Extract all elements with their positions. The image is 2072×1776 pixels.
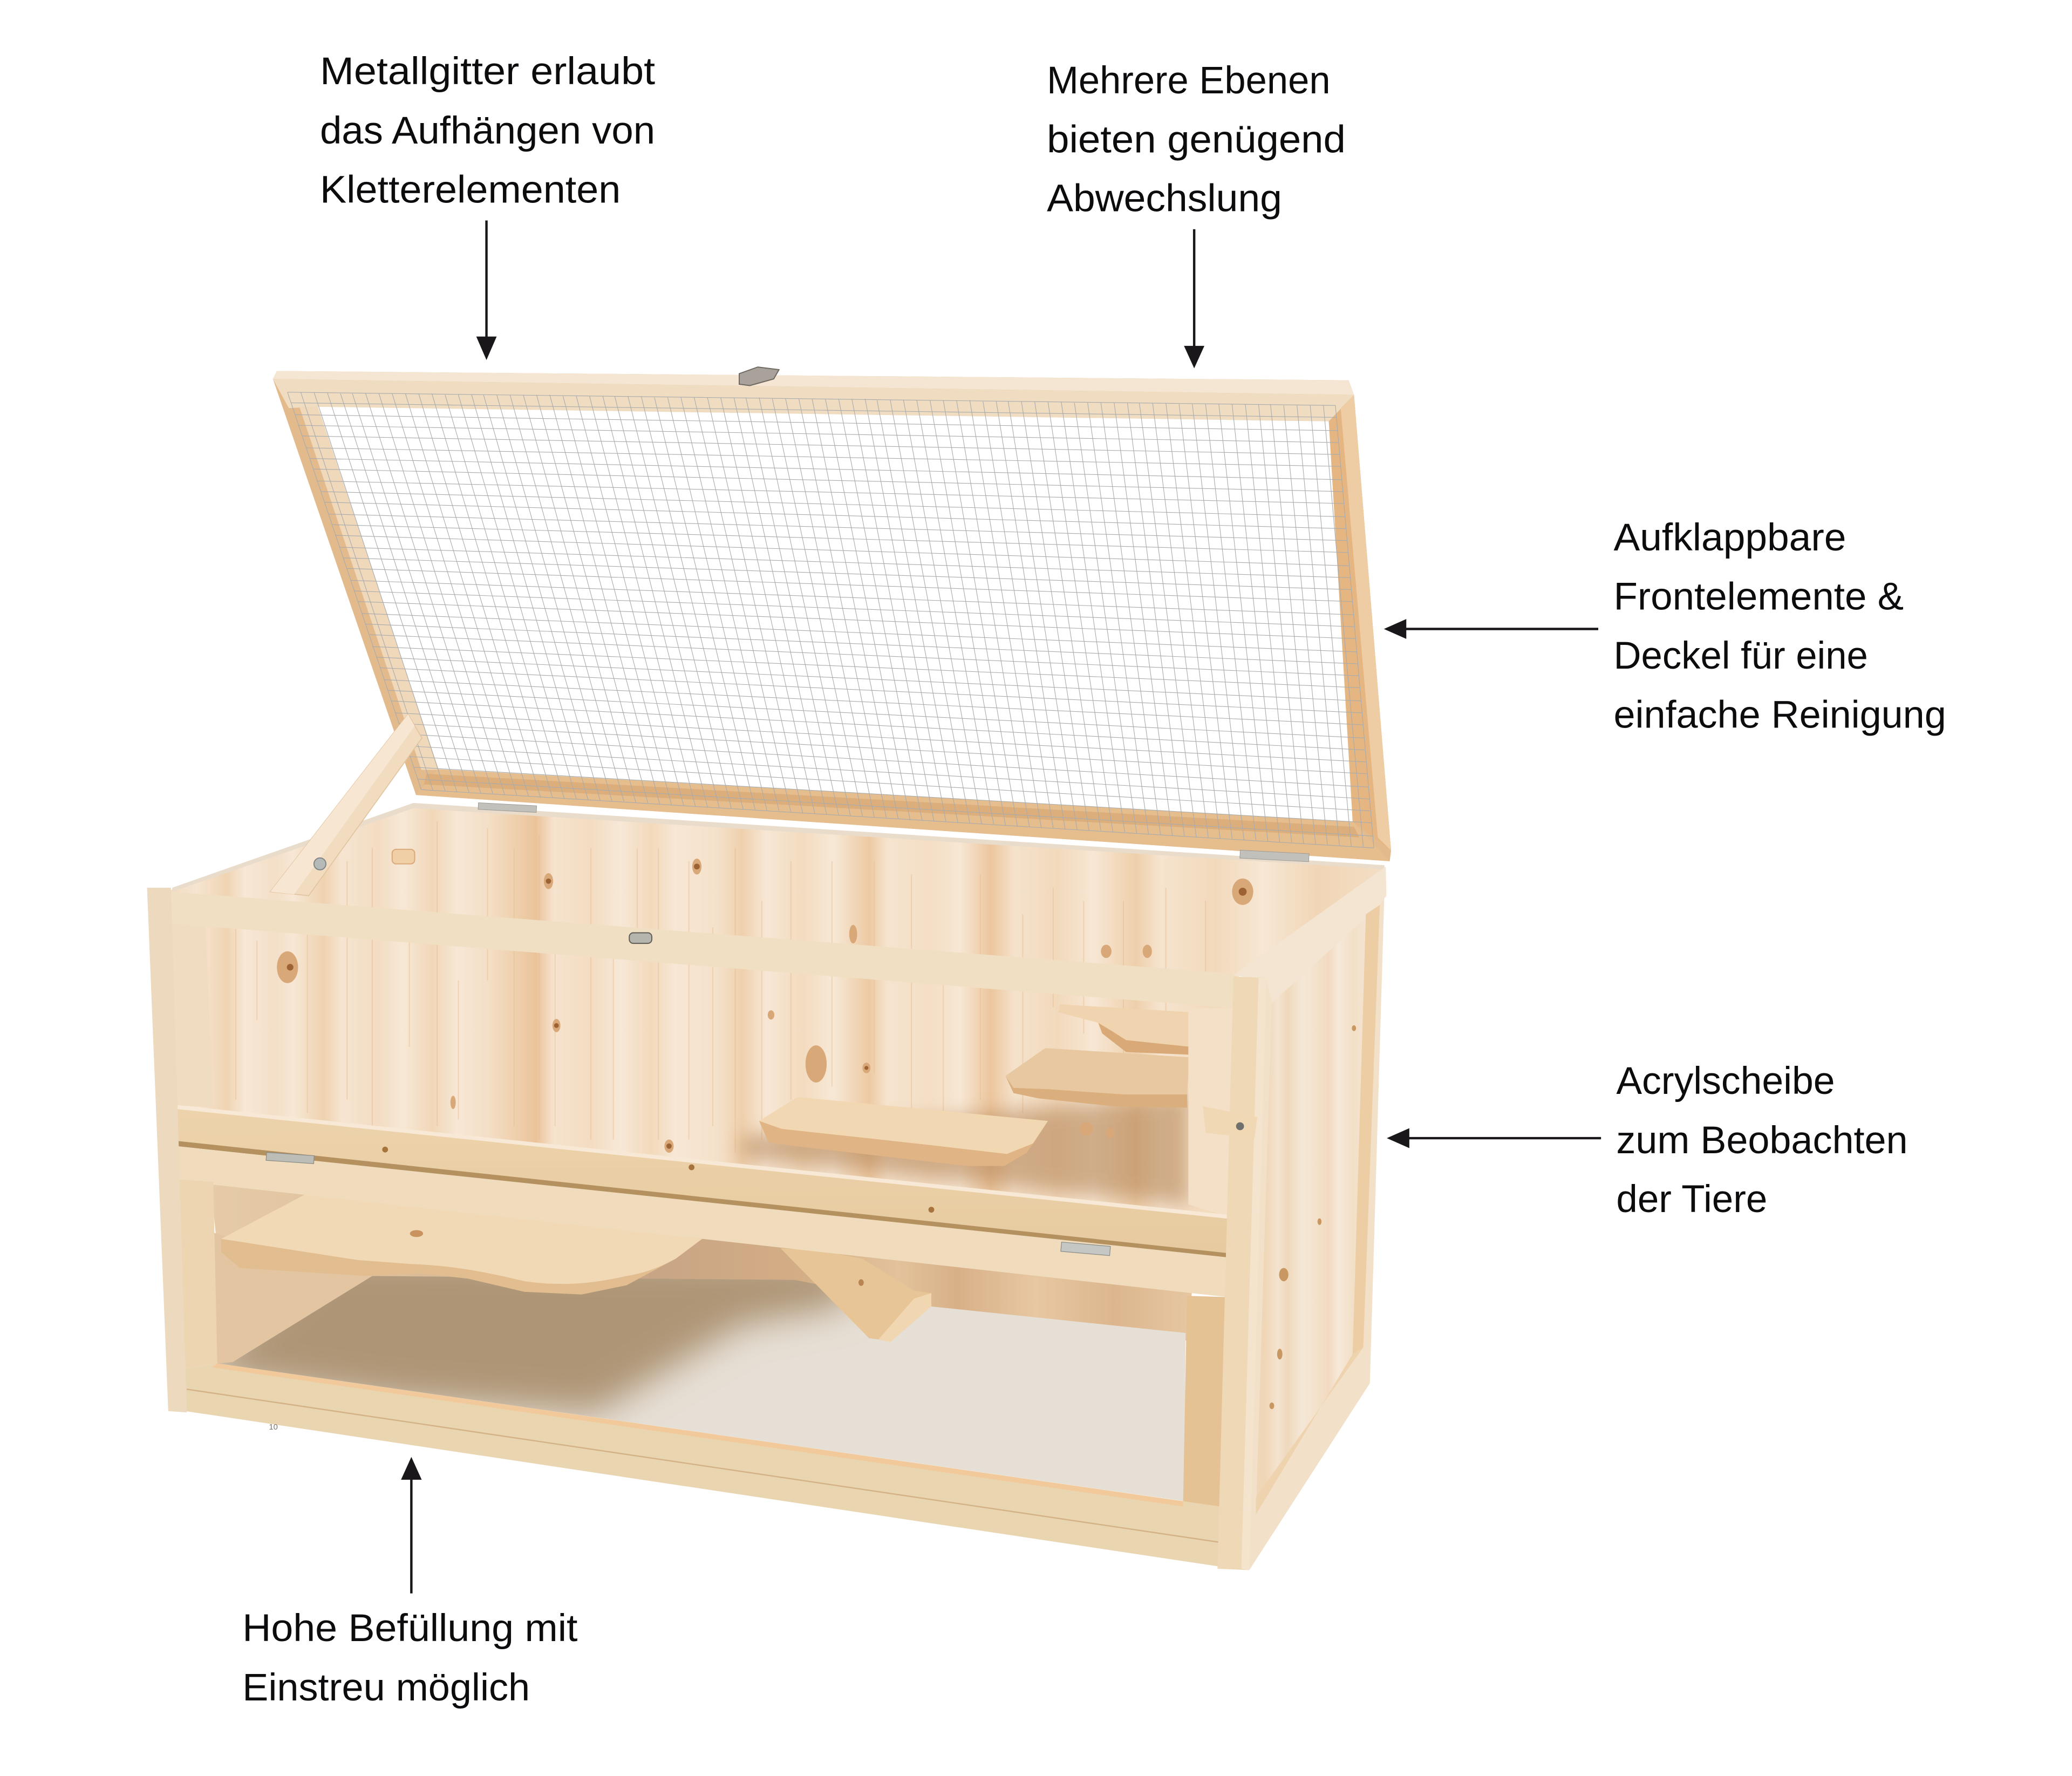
wooden peg: [392, 849, 414, 864]
callout: acrylic pane: der Tiere: [1616, 1178, 1767, 1221]
icon: platform knot: [410, 1230, 423, 1237]
hamster cage photo: [147, 367, 1391, 1570]
callout: acrylic pane: [1616, 1060, 1908, 1221]
arrow: acrylic pane: [1387, 1128, 1601, 1148]
floor: [219, 1276, 1186, 1501]
callout: folding front and lid: einfache Reinigung: [1613, 694, 1946, 737]
interior back wall: [169, 803, 1385, 1272]
icon: left lid hinge: [478, 803, 537, 812]
upper door bottom rail: [176, 1108, 1231, 1254]
callout: metal mesh: Metallgitter erlaubt: [320, 50, 655, 93]
left corner post: [147, 888, 187, 1412]
middle rail: [176, 1146, 1228, 1297]
arrow: bedding: [401, 1457, 422, 1594]
callout: acrylic pane: zum Beobachten: [1616, 1119, 1908, 1162]
callout: bedding: Hohe Befüllung mit: [242, 1607, 578, 1650]
icon: right lid hinge: [1240, 850, 1309, 862]
lower platform: [221, 1193, 702, 1295]
callout: folding front and lid: [1613, 516, 1946, 737]
lower right post: [1183, 1296, 1229, 1510]
callout: folding front and lid: Frontelemente &: [1613, 575, 1904, 618]
door latch block: [1203, 1106, 1257, 1138]
open lid with metal mesh: [273, 367, 1391, 861]
middle shelf: [1006, 1048, 1190, 1108]
arrow: folding front and lid: [1384, 619, 1598, 639]
callout: metal mesh: das Aufhängen von: [320, 110, 655, 152]
icon: left door hinge: [266, 1152, 314, 1163]
bottom rail: [186, 1363, 1229, 1568]
callout: levels: Abwechslung: [1047, 178, 1282, 220]
callout: folding front and lid: Aufklappbare: [1613, 516, 1846, 559]
callout: metal mesh: Kletterelementen: [320, 169, 621, 212]
lower shelf: [759, 1097, 1048, 1166]
upper door right stile: [1188, 1008, 1235, 1217]
upper door left stile: [169, 923, 213, 1108]
lower compartment: [199, 1173, 1192, 1501]
arrow: metal mesh: [476, 221, 496, 360]
callout: levels: bieten genügend: [1047, 118, 1346, 161]
climbing shelves: [759, 1004, 1192, 1166]
support strut: [270, 714, 422, 896]
icon: door clasp: [629, 933, 652, 943]
upper door top rail: [169, 892, 1235, 1008]
gap shadow below door: [176, 1141, 1231, 1258]
top shelf: [1059, 1004, 1192, 1054]
icon: latch screw: [1236, 1122, 1244, 1130]
callout: levels: Mehrere Ebenen: [1047, 59, 1331, 102]
callout: folding front and lid: Deckel für eine: [1613, 635, 1868, 677]
ramp: [780, 1248, 931, 1342]
callout: levels: [1047, 59, 1346, 220]
lower left post: [176, 1179, 217, 1369]
small mark on rail: 10: [269, 1423, 278, 1432]
callout: acrylic pane: Acrylscheibe: [1616, 1060, 1835, 1103]
icon: lid hasp: [739, 367, 779, 385]
icon: strut bolt: [314, 858, 326, 870]
arrow: levels: [1184, 229, 1204, 369]
callout: metal mesh: [320, 50, 655, 212]
icon: right door hinge: [1061, 1242, 1110, 1256]
callout: bedding: [242, 1607, 578, 1709]
front frame: [147, 803, 1309, 1568]
callout: bedding: Einstreu möglich: [242, 1666, 530, 1709]
right side wall: [1217, 867, 1386, 1570]
